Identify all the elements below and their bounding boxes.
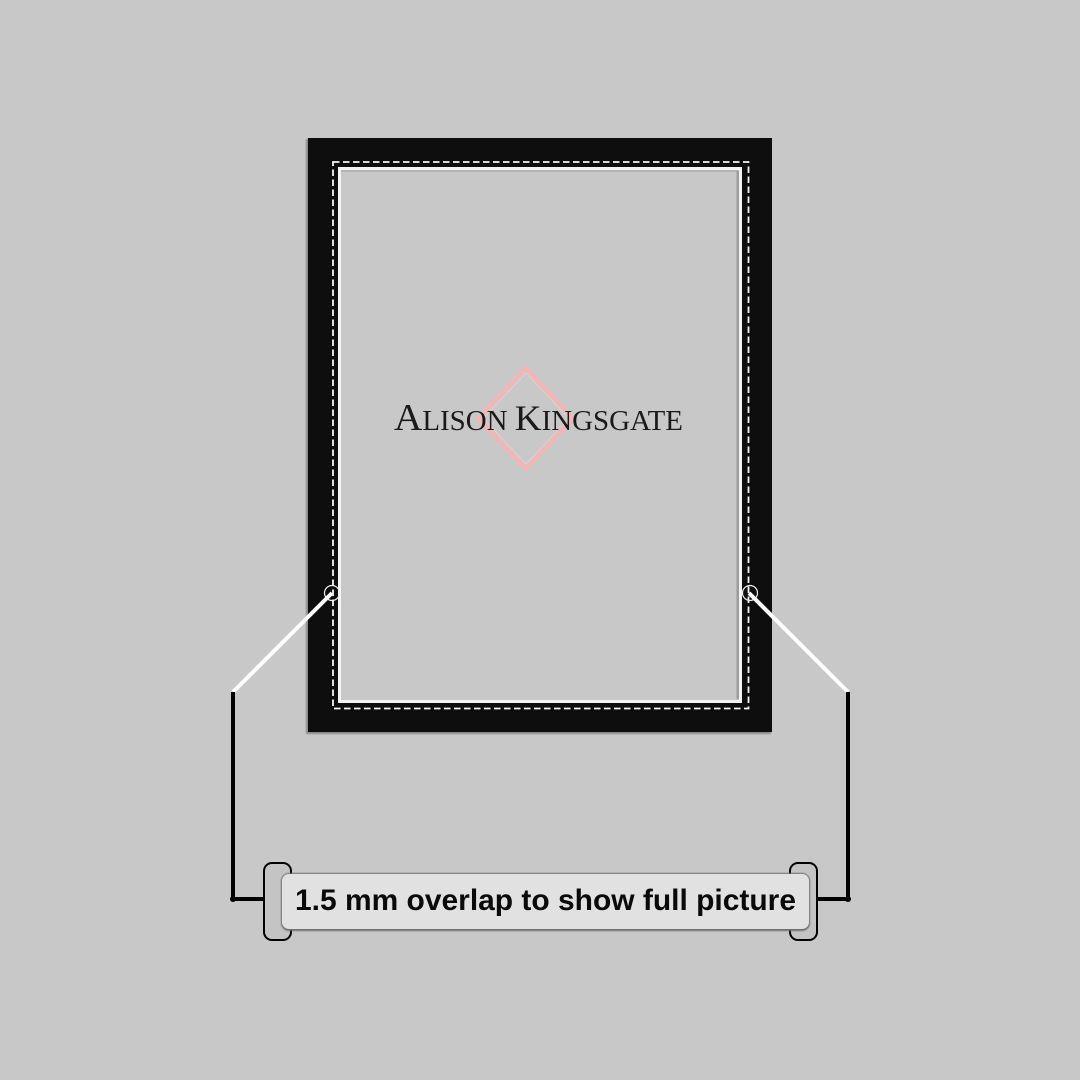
logo watermark xyxy=(394,368,683,469)
label text: 1.5 mm overlap to show full picture xyxy=(295,884,796,917)
logo diamond xyxy=(478,368,574,469)
right callout line xyxy=(742,586,851,902)
label bracket right xyxy=(790,863,817,940)
picture opening bevel xyxy=(340,168,740,702)
left callout line xyxy=(230,586,340,902)
right marker circle xyxy=(742,586,758,600)
picture frame mat xyxy=(306,138,772,734)
label bracket left xyxy=(264,863,291,940)
logo wordmark: ALISON KINGSGATE xyxy=(394,397,683,439)
label box xyxy=(281,873,810,931)
dashed stitch line xyxy=(333,162,748,708)
left marker circle xyxy=(324,586,340,600)
